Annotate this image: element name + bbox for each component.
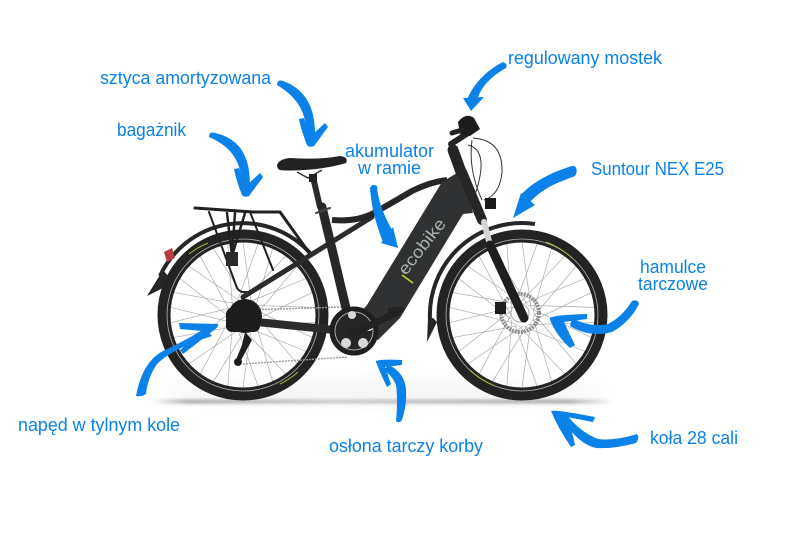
bicycle	[147, 116, 601, 394]
ecobike logo: ecobike	[394, 215, 450, 278]
brake cables	[468, 138, 502, 200]
rear wheel	[164, 236, 322, 394]
brake disc	[495, 294, 539, 332]
arrow: seat post	[277, 80, 328, 147]
rear fender and mudflap	[147, 223, 310, 296]
front fender and mudflap	[427, 223, 535, 342]
cassette and derailleur	[226, 299, 262, 366]
arrow: rear hub drive	[136, 323, 218, 396]
arrow: rack	[209, 132, 263, 197]
yellow frame accent	[402, 275, 413, 283]
arrow: chainring guard	[376, 360, 406, 422]
label: suspension fork: Suntour NEX E25	[591, 159, 724, 179]
rear frame stays	[243, 217, 372, 330]
curved top tube	[332, 180, 447, 220]
arrow: disc brakes	[550, 300, 639, 348]
seat tube and post	[313, 177, 350, 325]
label: chainring guard: osłona tarczy korby	[329, 436, 483, 456]
stem and handlebar	[451, 116, 480, 172]
label: disc brakes: hamulce	[640, 257, 706, 277]
label: adjustable stem: regulowany mostek	[508, 48, 663, 68]
label: suspension seat post: sztyca amortyzowana	[100, 68, 272, 88]
label: battery in frame: akumulator	[345, 141, 434, 161]
label: disc brakes line 2: tarczowe	[638, 274, 708, 294]
luggage rack	[195, 208, 310, 292]
headlight	[485, 198, 496, 209]
tail light	[164, 248, 175, 262]
chain	[243, 307, 347, 364]
arrow: battery	[370, 185, 398, 248]
saddle	[277, 156, 347, 182]
battery down tube	[350, 170, 473, 340]
front wheel	[443, 236, 601, 394]
label: rack: bagażnik	[117, 120, 187, 140]
fork	[462, 172, 524, 318]
ground shadow	[150, 382, 615, 403]
arrow: stem	[463, 62, 507, 111]
label: battery in frame line 2: w ramie	[357, 158, 421, 178]
crank and chainring	[332, 306, 404, 353]
arrow: wheels	[551, 411, 638, 448]
arrow: suspension fork	[513, 166, 577, 218]
label: 28 inch wheels: koła 28 cali	[650, 428, 738, 448]
label: rear wheel drive: napęd w tylnym kole	[18, 415, 180, 435]
